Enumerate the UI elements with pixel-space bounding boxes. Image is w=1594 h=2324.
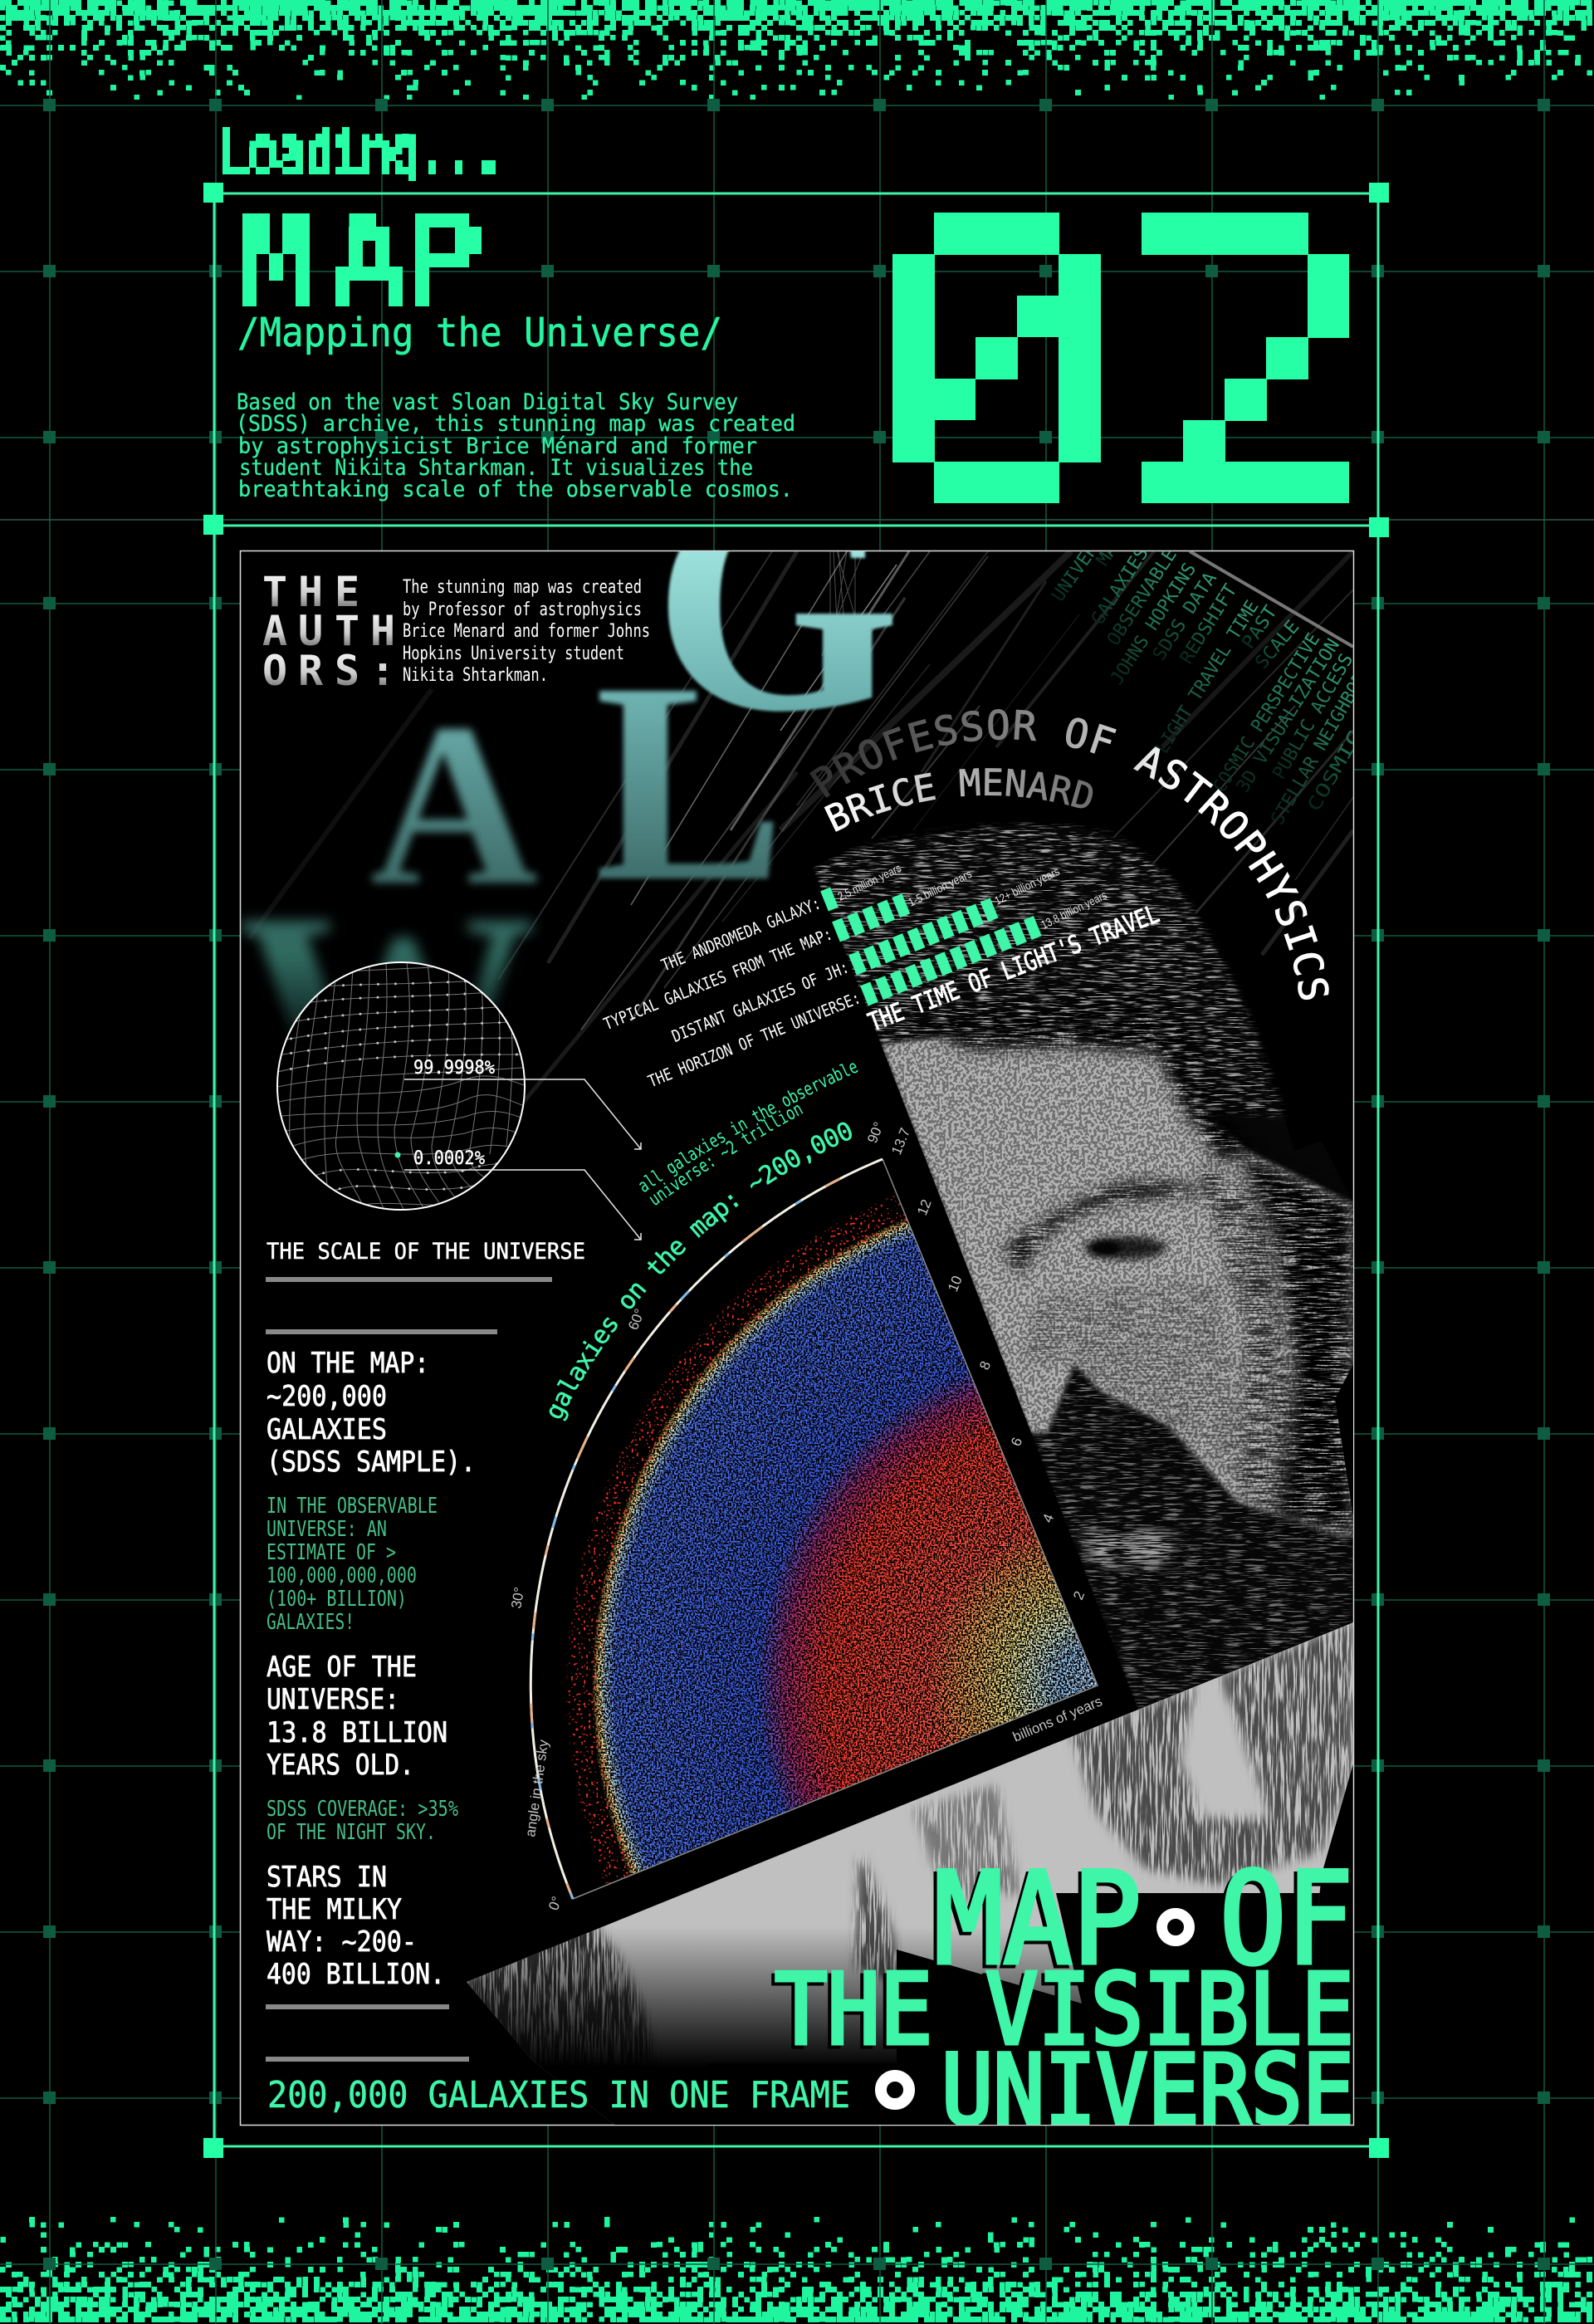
authors text: Brice Menard and former Johns xyxy=(403,621,650,642)
label 0.0002% with dot: 0.0002% xyxy=(413,1148,485,1169)
fact: on the map xyxy=(266,1347,476,1479)
fact: stars in the Milky Way: 400 BILLION. xyxy=(266,1958,445,1991)
header: description: breathtaking scale of the observable cosmos. xyxy=(238,477,793,502)
keyword cloud: OBSERVABLE xyxy=(1103,545,1181,649)
scale circle with warped mesh xyxy=(274,962,531,1216)
big blurred letters xyxy=(237,424,901,1182)
big blurred letters: L xyxy=(594,624,785,941)
fact: stars in the Milky Way: STARS IN xyxy=(266,1861,387,1894)
poster title: UNIVERSE xyxy=(941,2033,1354,2147)
keyword cloud: REDSHIFT xyxy=(1176,580,1241,668)
fan axis labels: 90° xyxy=(864,1120,887,1145)
bar row: distant galaxies xyxy=(669,898,998,1048)
big blurred letters: A xyxy=(370,675,538,933)
light travel bars xyxy=(600,861,1109,1093)
fact: age of the universe: YEARS OLD. xyxy=(266,1749,414,1782)
header: big number 02: 2 xyxy=(1103,134,1396,598)
fan outer arc xyxy=(531,1159,883,1899)
lower photo dark streak patches xyxy=(465,1622,1353,2126)
fan axis labels: billions of years xyxy=(1010,1693,1104,1745)
fact: observable universe: ESTIMATE OF > xyxy=(266,1540,396,1565)
scale heading: THE SCALE OF THE UNIVERSE xyxy=(266,1239,585,1265)
scale heading xyxy=(266,1239,585,1282)
authors text: by Professor of astrophysics xyxy=(403,599,642,620)
authors heading xyxy=(262,568,395,695)
fan axes xyxy=(573,1159,1098,1899)
keyword cloud: PUBLIC ACCESS xyxy=(1269,650,1357,783)
fact: stars in the Milky Way: THE MILKY xyxy=(266,1893,402,1926)
arrow: to on-map note xyxy=(404,1170,641,1240)
curved heading: galaxies on the map: galaxies on the map: ~200,000 xyxy=(550,1123,852,1421)
title ring icon xyxy=(1162,1913,1189,1941)
pixel noise band: bottom xyxy=(0,2217,1594,2324)
header: subtitle: /Mapping the Universe/ xyxy=(237,310,722,356)
header: description: Based on the vast Sloan Digital Sky Survey xyxy=(237,389,738,415)
fact: age of the universe xyxy=(266,1651,447,1782)
fact: observable universe: UNIVERSE: AN xyxy=(266,1517,387,1542)
authors heading: AUTH xyxy=(262,607,395,655)
keyword cloud: COSMIC PERSPECTIVE xyxy=(1210,630,1324,796)
panel contents (clipped) xyxy=(241,551,1353,2125)
keyword cloud: PAST xyxy=(1238,602,1282,653)
left column facts xyxy=(266,1329,497,2062)
curved title: professor of astrophysics: PROFESSOR OF ASTROPHYSICS xyxy=(809,709,1329,1000)
fan axis labels: 4 xyxy=(1039,1512,1057,1524)
galaxy fan chart xyxy=(508,1120,1104,1912)
keyword cloud: 3D VISUALIZATION xyxy=(1233,635,1344,796)
fan axis labels: 2 xyxy=(1070,1589,1088,1602)
portrait jaw notch xyxy=(1335,1364,1353,1516)
header: description xyxy=(236,389,795,502)
fact: stars in the Milky Way xyxy=(266,1861,445,1991)
arrow: to all galaxies note xyxy=(404,1079,641,1149)
fact: on the map: ON THE MAP: xyxy=(266,1347,429,1380)
portrait beard xyxy=(1030,1364,1352,1710)
streak lines xyxy=(249,551,1362,1113)
fact: observable universe xyxy=(266,1494,438,1635)
poster title: THE VISIBLE xyxy=(775,1952,1354,2067)
portrait sideburn xyxy=(1237,1150,1353,1537)
portrait: lower photo xyxy=(465,1619,1362,2134)
poster title: OF xyxy=(1220,1846,1353,1994)
bar row: Andromeda: THE ANDROMEDA GALAXY: xyxy=(658,893,824,975)
portrait head silhouette xyxy=(1112,837,1154,872)
poster title xyxy=(775,1846,1354,2147)
keyword cloud: SCALE xyxy=(1251,617,1303,673)
keyword cloud: SDSS DATA xyxy=(1149,569,1221,664)
authors text: The stunning map was created xyxy=(403,577,642,598)
label 99.9998%: 99.9998% xyxy=(413,1058,495,1079)
pixel noise band: top xyxy=(0,0,1594,100)
fact: SDSS coverage: SDSS COVERAGE: >35% xyxy=(266,1797,458,1822)
fact: age of the universe: UNIVERSE: xyxy=(266,1683,399,1716)
keyword cloud: JOHNS HOPKINS xyxy=(1107,560,1200,688)
fact: age of the universe: 13.8 BILLION xyxy=(266,1716,447,1749)
keyword cloud: LIGHT TRAVEL TIME xyxy=(1152,597,1263,757)
big blurred letters: G xyxy=(653,424,901,778)
fact: on the map: ~200,000 xyxy=(266,1380,387,1413)
fact: on the map: GALAXIES xyxy=(266,1413,387,1446)
light travel caption: THE TIME OF LIGHT'S TRAVEL xyxy=(864,899,1163,1037)
bar row: horizon: THE HORIZON OF THE UNIVERSE: xyxy=(645,987,863,1091)
portrait face xyxy=(881,1013,1353,1537)
authors heading: THE xyxy=(262,568,359,616)
panel: main poster xyxy=(241,551,1353,2126)
header: description: student Nikita Shtarkman. It visualizes the xyxy=(239,455,753,481)
fan data points xyxy=(531,1159,1098,1899)
bar value labels: 13.8 billion years xyxy=(1039,888,1109,932)
mesh nodes xyxy=(274,976,531,1196)
header: big number 02 xyxy=(872,134,1396,598)
portrait brow and eye xyxy=(1005,1182,1200,1275)
lower photo black title block xyxy=(707,1893,1353,2126)
authors heading: ORS: xyxy=(262,647,395,695)
header: big number 02: 0 xyxy=(872,134,1123,598)
fan outer red sparse ring xyxy=(531,1159,1098,1899)
big blurred letters: W xyxy=(237,850,536,1182)
bar row: horizon xyxy=(645,916,1042,1093)
keyword cloud: STELLAR NEIGHBORS xyxy=(1268,660,1376,829)
header: description: (SDSS) archive, this stunning map was created xyxy=(236,411,795,437)
fact: observable universe: 100,000,000,000 xyxy=(266,1563,417,1588)
fan axis labels: 10 xyxy=(945,1274,966,1294)
fan axis labels xyxy=(508,1120,1104,1912)
bar value labels: 2.5 million years xyxy=(835,861,903,903)
portrait hair xyxy=(813,825,1284,1117)
portrait: upper photo xyxy=(813,825,1353,1710)
fan axis labels: 13.7 xyxy=(888,1126,913,1157)
bar value labels: 1-5 billion years xyxy=(906,867,974,909)
tagline ring icon xyxy=(881,2076,909,2104)
green outer frame xyxy=(203,183,1389,2158)
fact: observable universe: GALAXIES! xyxy=(266,1610,354,1635)
portrait cheek shading xyxy=(1021,1279,1245,1486)
authors text: Hopkins University student xyxy=(403,643,624,664)
fan axis labels: 12 xyxy=(914,1197,935,1217)
fact: stars in the Milky Way: WAY: ~200- xyxy=(266,1925,417,1959)
fact: SDSS coverage: OF THE NIGHT SKY. xyxy=(266,1820,436,1845)
note: all galaxies: universe: ~2 trillion xyxy=(649,1105,804,1206)
keyword cloud: GALAXIES xyxy=(1088,544,1153,629)
fan axis labels: 0° xyxy=(545,1894,565,1912)
keyword cloud: MAP xyxy=(1093,531,1128,570)
poster title: MAP xyxy=(934,1846,1142,1994)
fan axis labels: 8 xyxy=(976,1359,994,1372)
fact: observable universe: IN THE OBSERVABLE xyxy=(266,1494,438,1519)
fact: SDSS coverage xyxy=(266,1797,458,1845)
keyword cloud: COSMIC WEB xyxy=(1304,676,1396,815)
grey diagonal rule xyxy=(1190,551,1353,647)
authors text: Nikita Shtarkman. xyxy=(403,665,548,686)
fan axis labels: 30° xyxy=(508,1586,527,1610)
loading label: Loading... xyxy=(221,115,503,189)
bar value labels: 12+ billion years xyxy=(992,864,1062,908)
bar row: typical galaxies: TYPICAL GALAXIES FROM THE MAP: xyxy=(600,923,835,1034)
keyword cloud: UNIVERSE xyxy=(1048,522,1115,605)
fan axis labels: 60° xyxy=(625,1307,648,1332)
fan axis labels: angle in the sky xyxy=(522,1739,551,1838)
keyword cloud xyxy=(1051,551,1353,825)
fan axis labels: 6 xyxy=(1008,1436,1025,1448)
curved name: Brice Menard: BRICE MENARD xyxy=(824,768,1093,832)
bar row: distant galaxies: DISTANT GALAXIES OF JH: xyxy=(669,957,852,1046)
header: section title MAP: MAP xyxy=(237,188,484,337)
fact: age of the universe: AGE OF THE xyxy=(266,1651,417,1684)
header: description: by astrophysicist Brice Ménard and former xyxy=(238,433,757,459)
note: all galaxies: all galaxies in the observable xyxy=(639,1063,858,1192)
portrait hairline feathering xyxy=(922,996,1254,1162)
authors text xyxy=(403,577,650,686)
fact: on the map: (SDSS SAMPLE). xyxy=(266,1446,476,1479)
fact: observable universe: (100+ BILLION) xyxy=(266,1587,407,1612)
tagline: 200,000 GALAXIES IN ONE FRAME xyxy=(267,2074,850,2116)
bar value labels xyxy=(835,861,1109,932)
